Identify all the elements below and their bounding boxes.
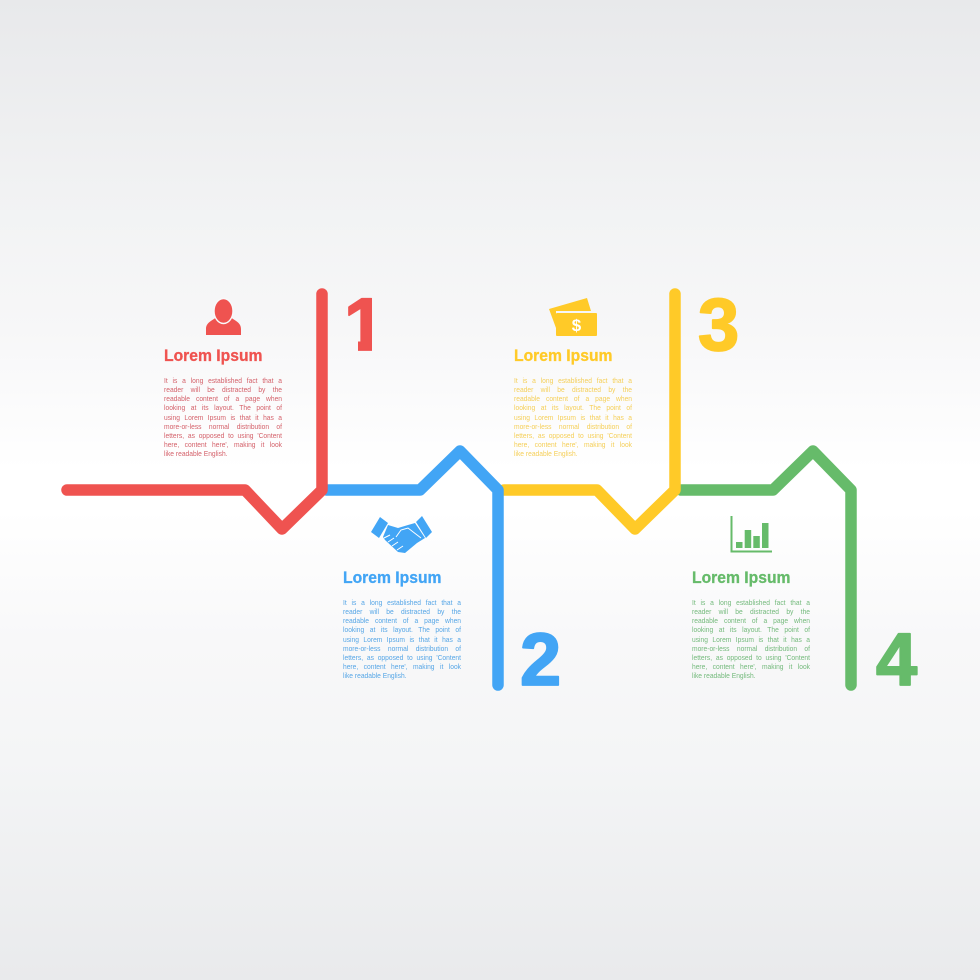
heading: Lorem Ipsum [164,346,262,365]
body text: readable content of a page when [164,394,282,403]
body text: using Lorem Ipsum is that it has a [692,635,810,644]
body text: more-or-less normal distribution of [692,644,810,653]
body text: reader will be distracted by the [164,385,282,394]
body text [342,598,461,680]
body text [692,598,810,680]
panel: step 1 [164,299,282,458]
yellow connector line [504,294,675,529]
panel: step 3 [514,298,632,458]
number 4: 4 [876,618,917,701]
body text: here, content here', making it look [342,662,461,671]
body text: looking at its layout. The point of [342,625,461,634]
body text: It is a long established fact that a [164,376,282,385]
body text: letters, as opposed to using 'Content [342,653,461,662]
body text: reader will be distracted by the [692,607,810,616]
panel: step 4 [692,516,810,680]
body text: like readable English. [692,671,756,680]
icon: bar chart [730,516,772,552]
blue connector line [327,451,498,685]
body text: reader will be distracted by the [514,385,632,394]
heading: Lorem Ipsum [514,346,612,365]
body text: like readable English. [164,449,227,458]
icon: handshake [371,516,432,553]
body text: looking at its layout. The point of [514,403,632,412]
body text: here, content here', making it look [164,440,282,449]
body text: using Lorem Ipsum is that it has a [164,413,282,422]
body text: here, content here', making it look [514,440,632,449]
body text: It is a long established fact that a [692,598,810,607]
body text: like readable English. [514,449,578,458]
body text: It is a long established fact that a [342,598,461,607]
green connector line [681,451,851,685]
body text [164,376,282,458]
heading: Lorem Ipsum [342,568,441,587]
body text: letters, as opposed to using 'Content [514,431,632,440]
body text: using Lorem Ipsum is that it has a [342,635,461,644]
red connector line [67,294,322,529]
body text: letters, as opposed to using 'Content [692,653,810,662]
heading: Lorem Ipsum [692,568,790,587]
body text: more-or-less normal distribution of [342,644,461,653]
number 3: 3 [698,283,739,366]
icon: money [549,298,597,336]
number 2: 2 [520,618,561,701]
panel: step 2 [342,516,461,680]
body text: readable content of a page when [514,394,632,403]
body text: using Lorem Ipsum is that it has a [514,413,632,422]
body text: readable content of a page when [692,616,810,625]
body text: more-or-less normal distribution of [164,422,282,431]
body text: looking at its layout. The point of [164,403,282,412]
body text: like readable English. [342,671,406,680]
body text: letters, as opposed to using 'Content [164,431,282,440]
body text: readable content of a page when [342,616,461,625]
number 1: 1 [344,283,385,366]
icon: person [206,299,241,335]
body text: It is a long established fact that a [514,376,632,385]
body text: reader will be distracted by the [342,607,461,616]
connector timeline [61,288,918,691]
body text: here, content here', making it look [692,662,810,671]
body text: looking at its layout. The point of [692,625,810,634]
body text: more-or-less normal distribution of [514,422,632,431]
body text [514,376,632,458]
icon: money: $ [572,316,582,335]
